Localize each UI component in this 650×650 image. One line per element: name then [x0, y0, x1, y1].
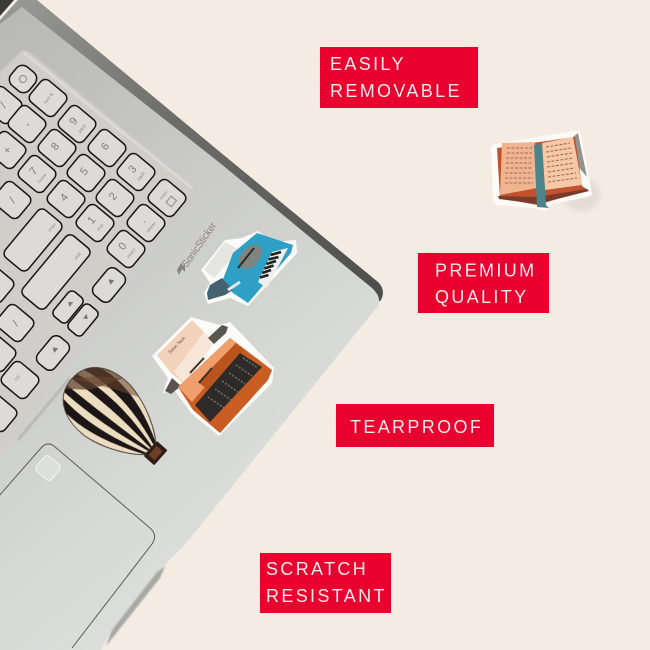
envelope	[64, 370, 155, 454]
type bars	[190, 358, 212, 383]
keyboard keys: pgdn	[136, 170, 146, 182]
text lines	[505, 143, 577, 183]
label: tearproof: TEARPROOF	[350, 417, 483, 437]
brand logo: SonicSticker	[180, 220, 220, 270]
blue paper	[204, 242, 240, 278]
basket	[144, 441, 167, 465]
keyboard keys: 4	[58, 192, 71, 204]
label: scratch resistant: RESISTANT	[266, 586, 387, 606]
keyboard keys: -	[22, 119, 34, 130]
keyboard well	[0, 51, 192, 452]
cover	[497, 137, 588, 205]
label: scratch resistant	[260, 553, 391, 613]
ribbon	[534, 144, 549, 208]
keyboard keys: 3	[126, 163, 139, 176]
carriage	[208, 325, 228, 344]
label: premium quality: PREMIUM	[435, 260, 536, 280]
blue body	[222, 233, 293, 303]
keyboard keys: 1	[85, 214, 98, 227]
keyboard keys: /	[7, 195, 19, 206]
keyboard keys: enter	[47, 221, 58, 233]
left page	[500, 142, 537, 195]
gray roller	[234, 240, 266, 274]
keyboard keys: home	[36, 172, 48, 184]
keyboard keys: 7	[27, 165, 40, 178]
trackpad	[0, 444, 155, 648]
keyboard keys: ctrl	[13, 374, 21, 382]
label: easily removable	[320, 47, 478, 108]
shadow	[573, 133, 587, 177]
keyboard keys	[0, 62, 188, 434]
carriage	[207, 278, 233, 300]
sticker: blue typewriter	[201, 231, 297, 306]
keyboard keys: 2	[107, 191, 120, 203]
label: premium quality: QUALITY	[435, 287, 528, 307]
label: scratch resistant: SCRATCH	[266, 559, 368, 579]
keyboard keys: 5	[78, 166, 91, 178]
laptop silver body	[0, 7, 379, 650]
sticker: open book	[491, 131, 600, 211]
keyboard keys: num lk	[42, 91, 55, 105]
keyboard	[195, 353, 262, 422]
keyboard keys: pgup	[77, 122, 87, 134]
laptop dark edge	[0, 0, 383, 310]
label: easily removable: EASILY	[330, 54, 406, 74]
fingerprint square	[34, 454, 62, 482]
keyboard keys: shift	[73, 251, 83, 261]
keyboard keys: end	[96, 222, 105, 232]
keyboard keys: .	[137, 215, 149, 225]
keyboard keys: delete	[145, 220, 157, 233]
right page	[542, 137, 582, 190]
keyboard keys: 8	[49, 141, 62, 153]
keyboard keys: 6	[99, 141, 112, 153]
label: premium quality	[418, 253, 549, 313]
label: easily removable: REMOVABLE	[330, 81, 462, 101]
paper	[157, 320, 214, 384]
sticker: hot air balloon	[62, 366, 168, 466]
laptop	[0, 0, 383, 650]
piano keys	[258, 248, 288, 288]
orange body	[178, 338, 272, 433]
keyboard keys: /	[10, 318, 22, 329]
sticker: orange typewriter: Sonic Tech	[167, 335, 187, 355]
keyboard keys: insert	[126, 247, 137, 259]
keyboard keys: 9	[67, 115, 80, 128]
book shadow	[564, 179, 600, 211]
keyboard keys: 0	[116, 240, 129, 253]
keyboard keys: enter	[158, 189, 169, 201]
keyboard keys: +	[1, 144, 14, 157]
label: tearproof	[336, 404, 494, 447]
sticker: orange typewriter	[152, 317, 274, 436]
